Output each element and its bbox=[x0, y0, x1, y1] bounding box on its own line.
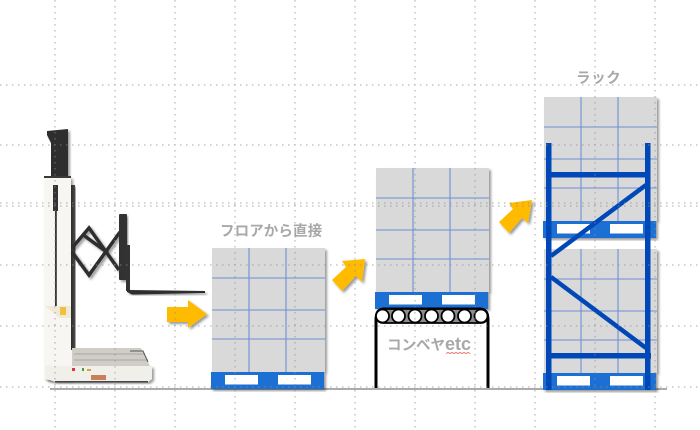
pallet 1 bbox=[211, 248, 325, 389]
arrow 1 bbox=[167, 300, 207, 328]
spellcheck underline bbox=[446, 352, 470, 354]
conveyor bbox=[376, 309, 488, 388]
mast top bbox=[47, 129, 68, 177]
beams bbox=[546, 172, 650, 178]
column logo strip bbox=[53, 185, 58, 211]
control panel bbox=[45, 306, 71, 318]
pallet 3 bbox=[543, 97, 657, 238]
arrow 3 bbox=[499, 200, 532, 233]
arrow 2 bbox=[332, 259, 365, 291]
rear rail bbox=[71, 185, 75, 350]
base bbox=[72, 348, 150, 366]
label: conveyor: コンベヤetc bbox=[387, 334, 471, 354]
pallet 4 bbox=[543, 249, 657, 390]
forklift robot bbox=[44, 129, 205, 382]
fork carriage bbox=[119, 214, 127, 280]
white column bbox=[44, 177, 72, 380]
pallet 2 bbox=[375, 168, 489, 309]
braces bbox=[551, 185, 646, 256]
ground line bbox=[50, 388, 667, 390]
rack bbox=[546, 143, 651, 390]
label: floor: フロアから直接 bbox=[220, 222, 322, 240]
scissor arm bbox=[72, 228, 120, 275]
uprights bbox=[546, 143, 552, 390]
conveyor frame bbox=[376, 309, 488, 388]
label: rack: ラック bbox=[576, 70, 621, 87]
rollers bbox=[376, 310, 488, 322]
fork bbox=[127, 288, 205, 294]
